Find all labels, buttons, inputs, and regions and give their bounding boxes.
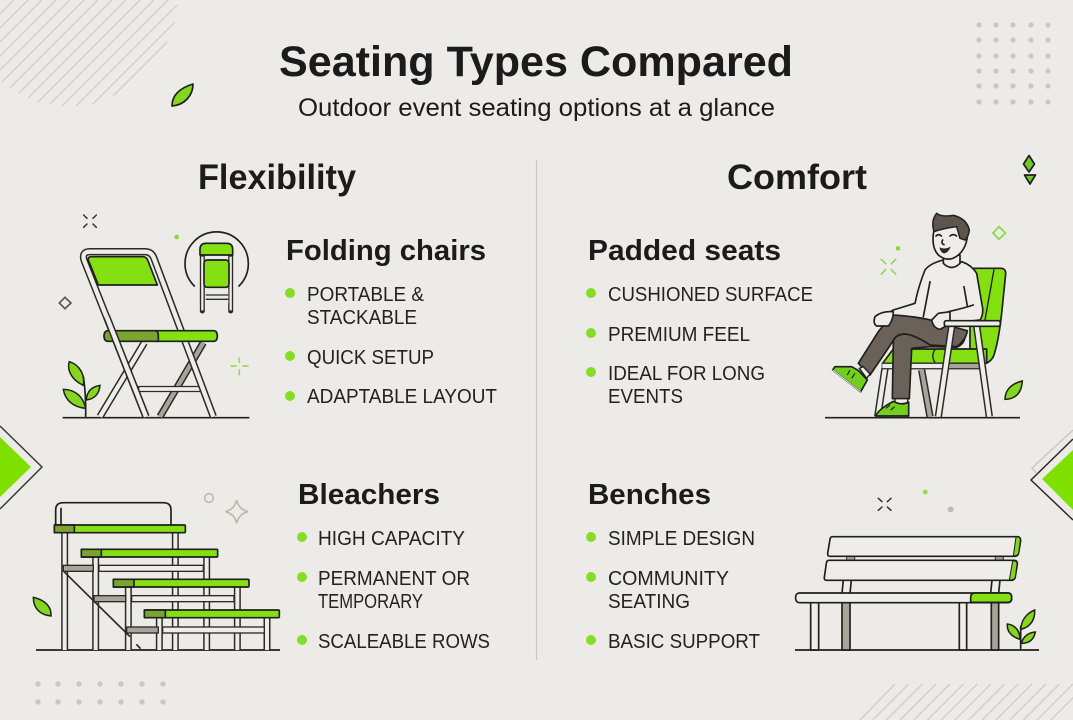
icon: sparkle dark [878, 498, 891, 510]
illustration: bench [795, 490, 1039, 650]
ground line [63, 415, 249, 420]
icon: green dot [174, 235, 179, 239]
bullet: ideal for long events: EVENTS [608, 386, 683, 408]
heading: Flexibility: Flexibility [198, 158, 357, 197]
planted shoe [876, 401, 909, 416]
bullet: ideal for long events [586, 363, 765, 408]
upper slat [828, 537, 1021, 556]
bullet: basic support: BASIC SUPPORT [608, 631, 760, 653]
icon: folded chair mini [185, 232, 248, 311]
ground line [825, 415, 1020, 420]
decoration: right green diamond [1031, 430, 1073, 520]
head [943, 255, 960, 267]
panel: padded seats text [586, 235, 813, 408]
icon: green diamond [993, 227, 1005, 239]
icon: sparkle dark [84, 215, 96, 227]
ground line [36, 647, 280, 652]
diagonal brace [64, 572, 141, 649]
bullet: community seating [586, 568, 729, 613]
seat [796, 593, 1012, 603]
icon: small diamonds top right [1024, 156, 1036, 184]
chair back [970, 268, 1006, 363]
bullet: portable and stackable: PORTABLE & [307, 284, 425, 306]
hair [933, 213, 969, 240]
bullet: adaptable layout: ADAPTABLE LAYOUT [307, 386, 497, 408]
chair seat [883, 349, 987, 363]
heading: Folding chairs: Folding chairs [286, 235, 486, 267]
illustration: bleachers [33, 494, 280, 650]
bullet: portable and stackable [285, 284, 425, 329]
raised sock [859, 367, 870, 378]
connectors [847, 556, 855, 561]
panel: benches text [586, 479, 760, 653]
illustration: folding chair [59, 215, 249, 418]
icon: green sparkle [881, 259, 896, 274]
chair legs [878, 368, 885, 417]
icon: leaf top left [172, 84, 193, 106]
back rail [56, 503, 171, 525]
icon: leaf [1005, 381, 1022, 399]
icon: outline diamond [59, 297, 71, 309]
steps [63, 565, 93, 571]
support posts [65, 532, 267, 650]
heading: Bleachers: Bleachers [298, 479, 440, 511]
heading: Benches: Benches [588, 479, 711, 511]
subtitle: Outdoor event seating options at a glance [298, 94, 775, 122]
bullet: permanent or temporary: PERMANENT OR [318, 568, 470, 590]
icon: plant [63, 362, 100, 417]
panel: folding chairs text [285, 235, 497, 408]
icon: green dot [896, 246, 900, 251]
bullet: quick setup: QUICK SETUP [307, 347, 434, 369]
ground line [795, 647, 1039, 652]
icon: leaf [33, 597, 51, 616]
bench rows [54, 525, 279, 618]
bullet: premium feel: PREMIUM FEEL [608, 324, 750, 346]
panel: bleachers text [297, 479, 490, 653]
raised shoe [833, 367, 867, 392]
title: Seating Types Compared [279, 38, 793, 86]
seat [155, 331, 217, 341]
icon: plant [1007, 610, 1035, 648]
dot grid: bottom left [35, 681, 166, 705]
lower slat [824, 560, 1017, 580]
icon: green dot [923, 490, 928, 494]
icon: ring [205, 494, 213, 502]
torso [885, 260, 983, 323]
heading: Padded seats: Padded seats [588, 235, 781, 267]
heading: Comfort: Comfort [727, 158, 867, 197]
illustration: person on padded chair [825, 213, 1022, 418]
bullet: ideal for long events: IDEAL FOR LONG [608, 363, 765, 385]
icon: grey dot [948, 506, 954, 512]
bullet: community seating: COMMUNITY [608, 568, 729, 590]
bullet: high capacity: HIGH CAPACITY [318, 528, 465, 550]
hands [874, 312, 893, 326]
lower leg [892, 331, 965, 399]
icon: star outline [225, 500, 248, 523]
face [936, 235, 957, 245]
icon: green sparkle [231, 358, 248, 375]
bullet: cushioned surface: CUSHIONED SURFACE [608, 284, 813, 306]
bullet: simple design: SIMPLE DESIGN [608, 528, 755, 550]
bullet: portable and stackable: STACKABLE [307, 307, 417, 329]
bullet: scaleable rows: SCALEABLE ROWS [318, 631, 490, 653]
bullet: permanent or temporary [297, 568, 470, 613]
bullet: community seating: SEATING [608, 591, 690, 613]
decoration: left green diamond [0, 426, 42, 509]
bullet: permanent or temporary: TEMPORARY [318, 591, 423, 613]
planted sock [895, 399, 908, 404]
upper crossed leg [858, 315, 967, 375]
dot grid: top right [976, 22, 1051, 105]
front leg and armrest [938, 327, 952, 417]
bench legs [811, 602, 819, 650]
